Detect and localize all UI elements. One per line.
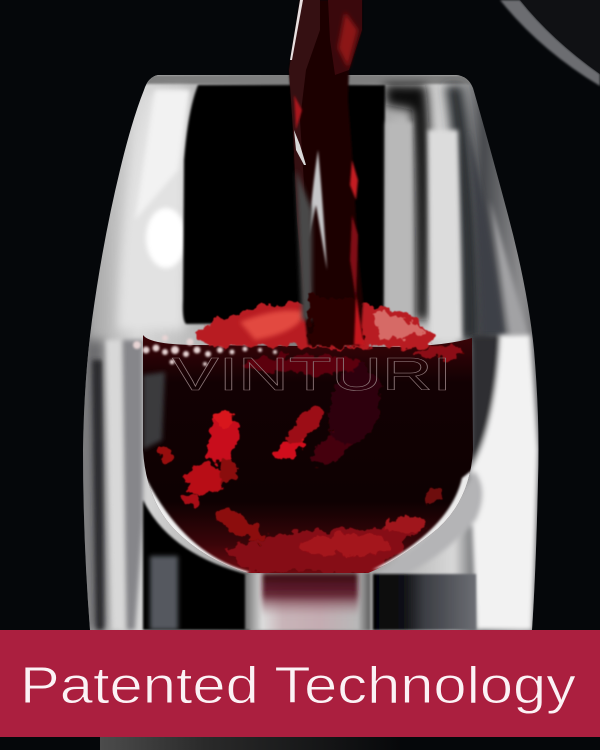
wine stream pouring xyxy=(289,0,364,345)
wine bowl xyxy=(143,335,473,575)
grey reflection on upper left of bowl xyxy=(143,372,165,450)
central dark window xyxy=(183,85,385,324)
white crescent left xyxy=(146,478,250,575)
wine splash and foam on surface xyxy=(133,302,434,366)
banner title: Patented Technology xyxy=(20,657,576,715)
bubbles xyxy=(133,335,277,366)
white crescent right xyxy=(372,470,472,570)
stem xyxy=(245,573,370,630)
right glass streaks xyxy=(385,85,480,340)
lower right highlight panels xyxy=(372,335,538,630)
engraved logo on the glass: VINTURI xyxy=(172,348,452,400)
dark area beside stem xyxy=(143,500,250,630)
decanter edge in top right corner xyxy=(500,0,600,86)
base below banner xyxy=(100,737,400,750)
glass rim xyxy=(140,75,480,84)
left white highlights xyxy=(84,90,186,630)
red wine swirls xyxy=(160,346,465,548)
banner xyxy=(0,630,600,737)
wine base glow xyxy=(225,518,427,573)
aerator glass body xyxy=(70,60,550,640)
stream highlights xyxy=(290,0,303,60)
